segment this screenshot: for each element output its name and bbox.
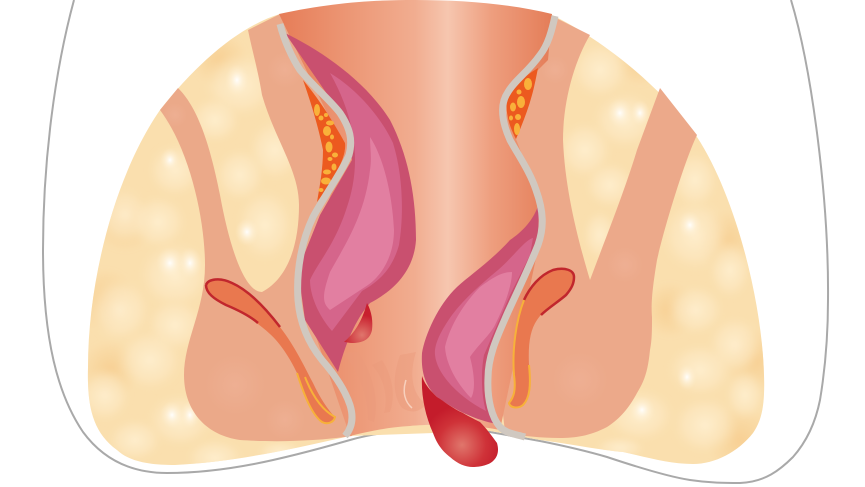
left mucosa (285, 33, 416, 372)
right mucosa (422, 203, 539, 424)
right sphincter (509, 269, 574, 407)
central canal (279, 0, 552, 436)
fold highlight (404, 380, 412, 408)
prolapsed hemorrhoid (422, 376, 498, 467)
grey wall right (488, 16, 555, 437)
fat tissue (88, 14, 764, 465)
right gland (507, 68, 538, 139)
anal folds (343, 352, 426, 422)
left muscle tissue (160, 14, 352, 441)
grey wall left (280, 24, 352, 436)
left gland (303, 80, 345, 202)
left sphincter (206, 279, 335, 423)
small internal hemorrhoid (344, 303, 372, 343)
right muscle tissue (490, 14, 697, 438)
